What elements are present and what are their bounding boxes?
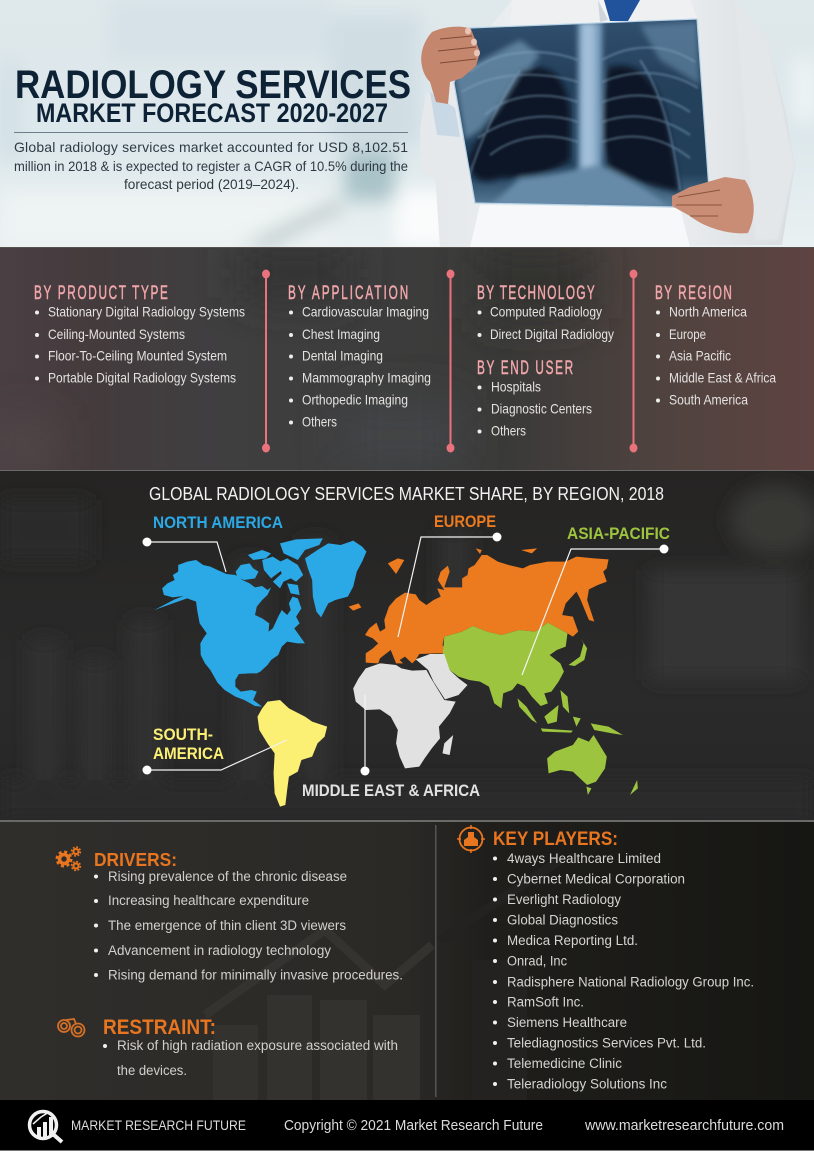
icon: gears bbox=[57, 847, 80, 870]
segment: by technology: Computed Radiology bbox=[490, 304, 602, 320]
callout: asia-pacific: ASIA-PACIFIC bbox=[567, 525, 670, 543]
segment: by product type: Stationary Digital Radiology Systems bbox=[48, 304, 245, 320]
segment: by application: BY APPLICATION bbox=[288, 283, 408, 304]
segment: by technology: BY TECHNOLOGY bbox=[477, 283, 595, 304]
segment: by region: BY REGION bbox=[655, 283, 732, 304]
left hand bbox=[421, 27, 480, 104]
intro text block: forecast period (2019–2024). bbox=[124, 176, 299, 192]
section: drivers: The emergence of thin client 3D viewers bbox=[108, 918, 346, 933]
segment: by region: Middle East & Africa bbox=[669, 370, 776, 386]
segment: by end user: Diagnostic Centers bbox=[491, 400, 592, 416]
footer bar: Copyright © 2021 Market Research Future bbox=[284, 1118, 543, 1134]
region: north america bbox=[154, 538, 366, 707]
panel: regional map bbox=[0, 471, 814, 820]
segment: by application: Dental Imaging bbox=[302, 348, 383, 364]
section: restraint: Risk of high radiation exposure associated with bbox=[117, 1038, 398, 1053]
segment dividers bbox=[262, 270, 638, 452]
segment: by technology: Direct Digital Radiology bbox=[490, 326, 614, 342]
callout: north america bbox=[142, 514, 283, 572]
section: drivers bbox=[57, 847, 403, 982]
section: key players: Everlight Radiology bbox=[507, 892, 621, 907]
segment: by application: Cardiovascular Imaging bbox=[302, 304, 429, 320]
intro text block: million in 2018 & is expected to register a CAGR of 10.5% during the bbox=[14, 158, 408, 174]
chest x-ray film bbox=[454, 19, 709, 207]
footer bar: www.marketresearchfuture.com bbox=[584, 1118, 784, 1134]
region: south america bbox=[257, 700, 327, 807]
segment: by end user bbox=[477, 358, 592, 438]
intro text block bbox=[14, 139, 408, 192]
doctor in white coat bbox=[420, 0, 795, 247]
region: asia-pacific bbox=[442, 623, 638, 795]
segment: by region: Asia Pacific bbox=[669, 348, 731, 364]
segment: by product type: BY PRODUCT TYPE bbox=[34, 283, 168, 304]
section: key players: Cybernet Medical Corporation bbox=[507, 872, 685, 886]
region: europe and russia bbox=[349, 548, 609, 663]
segment: by product type: Portable Digital Radiology Systems bbox=[48, 370, 236, 386]
segment: by technology bbox=[477, 283, 614, 342]
callout: south america: SOUTH- bbox=[153, 726, 213, 744]
section: drivers: Advancement in radiology technology bbox=[108, 943, 331, 958]
callout: middle east and africa bbox=[302, 695, 480, 800]
panel: drivers, restraint and key players bbox=[0, 822, 814, 1100]
section: restraint bbox=[58, 1016, 398, 1078]
section: key players: Telediagnostics Services Pvt. Ltd. bbox=[507, 1036, 706, 1050]
section: key players: Teleradiology Solutions Inc bbox=[507, 1076, 667, 1092]
callout: europe bbox=[398, 513, 502, 637]
segment: by region bbox=[655, 283, 776, 408]
section: key players: KEY PLAYERS: bbox=[493, 829, 618, 850]
title: MARKET FORECAST 2020-2027 bbox=[36, 98, 388, 128]
section: key players bbox=[457, 825, 754, 1092]
section: drivers: Increasing healthcare expenditure bbox=[108, 893, 309, 908]
icon: market research future logo bbox=[30, 1112, 62, 1142]
segment: by end user: Others bbox=[491, 422, 526, 438]
segment: by product type: Ceiling-Mounted Systems bbox=[48, 326, 185, 342]
footer bar bbox=[0, 1100, 814, 1151]
header photo panel bbox=[0, 0, 814, 247]
intro text block: Global radiology services market accounted for USD 8,102.51 bbox=[14, 139, 408, 155]
section: key players: Radisphere National Radiology Group Inc. bbox=[507, 974, 754, 990]
section: key players: Telemedicine Clinic bbox=[507, 1056, 622, 1071]
callout: europe: EUROPE bbox=[434, 513, 496, 531]
section: key players: RamSoft Inc. bbox=[507, 994, 584, 1010]
segment: by end user: BY END USER bbox=[477, 358, 573, 379]
section: drivers: Rising prevalence of the chronic disease bbox=[108, 869, 347, 884]
callout: south america: AMERICA bbox=[153, 745, 224, 763]
callout: north america: NORTH AMERICA bbox=[153, 514, 283, 532]
heading: map title: GLOBAL RADIOLOGY SERVICES MARKET SHARE, BY REGION, 2018 bbox=[149, 484, 664, 504]
segment: by application: Orthopedic Imaging bbox=[302, 392, 408, 408]
section: key players: Medica Reporting Ltd. bbox=[507, 933, 638, 948]
callout: middle east and africa: MIDDLE EAST & AFRICA bbox=[302, 782, 480, 800]
segment: by region: North America bbox=[669, 304, 747, 320]
section: key players: 4ways Healthcare Limited bbox=[507, 851, 661, 866]
region: middle east and africa bbox=[353, 654, 467, 768]
right hand bbox=[672, 177, 754, 233]
callout: south america bbox=[142, 726, 287, 774]
title: RADIOLOGY SERVICES bbox=[15, 63, 411, 107]
segment: by application bbox=[288, 283, 431, 430]
segment: by region: South America bbox=[669, 392, 748, 408]
segment: by application: Others bbox=[302, 414, 337, 430]
segment: by application: Chest Imaging bbox=[302, 326, 380, 342]
world map bbox=[154, 538, 638, 807]
segment: by application: Mammography Imaging bbox=[302, 370, 431, 386]
segment: by product type bbox=[34, 283, 245, 386]
panel: market segmentation bbox=[0, 248, 814, 470]
segment: by product type: Floor-To-Ceiling Mounted System bbox=[48, 348, 227, 364]
callout: asia-pacific bbox=[522, 525, 670, 675]
section: key players: Global Diagnostics bbox=[507, 912, 618, 928]
section: key players: Onrad, Inc bbox=[507, 954, 567, 968]
segment: by end user: Hospitals bbox=[491, 378, 541, 394]
icon: handcuffs bbox=[58, 1019, 84, 1036]
icon: people target bbox=[457, 825, 485, 853]
section: drivers: DRIVERS: bbox=[94, 849, 177, 870]
section: key players: Siemens Healthcare bbox=[507, 1015, 627, 1030]
title bbox=[15, 63, 411, 128]
segment: by region: Europe bbox=[669, 326, 706, 342]
section: drivers: Rising demand for minimally invasive procedures. bbox=[108, 968, 403, 982]
footer bar: MARKET RESEARCH FUTURE bbox=[71, 1117, 246, 1133]
section: restraint: the devices. bbox=[117, 1063, 187, 1078]
section: restraint: RESTRAINT: bbox=[103, 1016, 216, 1039]
